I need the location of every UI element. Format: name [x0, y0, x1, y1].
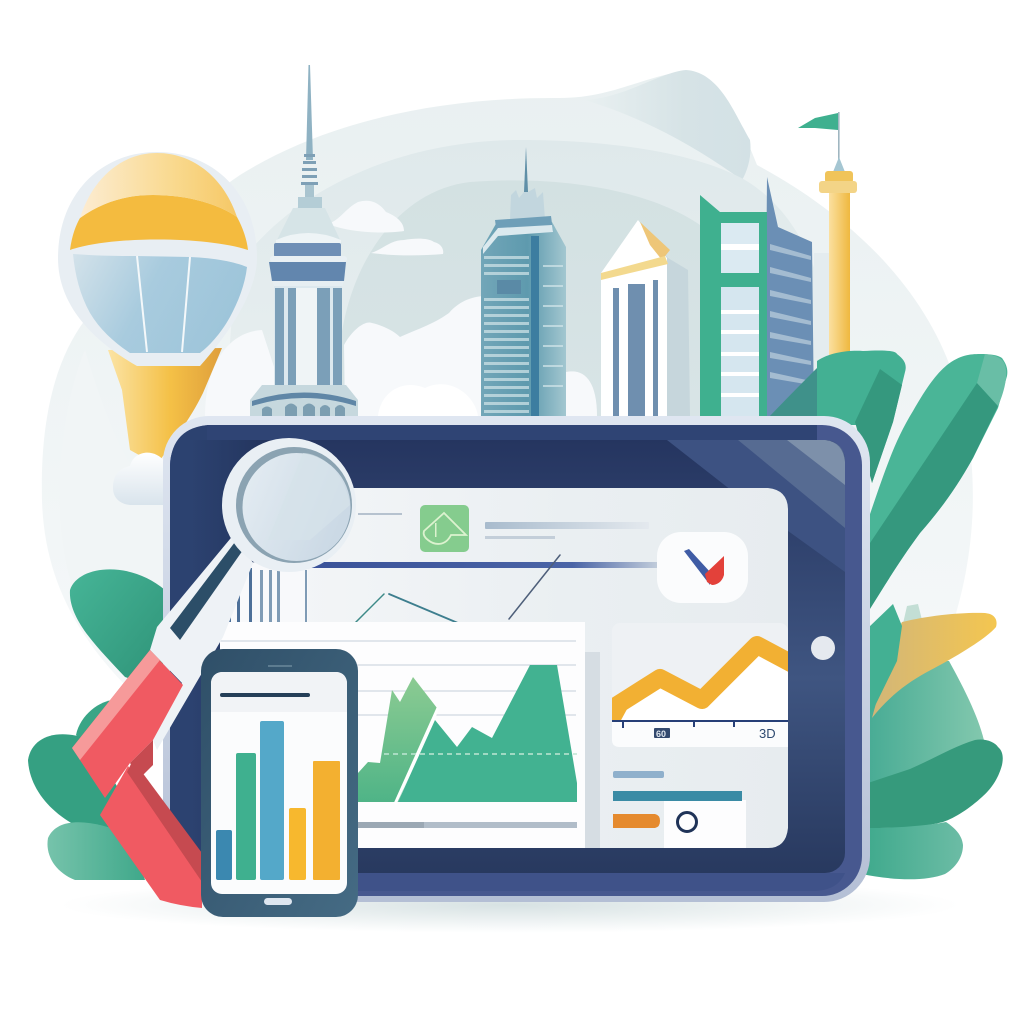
trend line behind card [355, 555, 560, 641]
footer bar [358, 822, 577, 828]
red handle grip [72, 650, 202, 908]
leaf: behind building [817, 350, 906, 483]
phone body [201, 649, 358, 917]
phone bar chart [216, 721, 340, 880]
dark green area [398, 665, 577, 802]
bulb top cap [80, 153, 237, 218]
lens rim [222, 438, 356, 572]
tablet [163, 416, 870, 902]
axis [612, 720, 788, 728]
orange trend line [600, 645, 800, 722]
phone screen [211, 672, 347, 894]
gloss band 1 [667, 440, 845, 572]
lower grip [100, 766, 202, 908]
axis labels: 60 [656, 729, 666, 739]
tablet left inner [190, 440, 307, 873]
phone heading [220, 693, 310, 697]
flag [798, 113, 838, 130]
green frame building [700, 177, 814, 416]
bulb neck [108, 348, 222, 465]
white office building [601, 220, 690, 416]
leaf: small green [868, 604, 902, 716]
gloss band 3 [787, 440, 845, 485]
dashed level [384, 753, 577, 755]
grip highlight [72, 650, 160, 760]
leaf: upper [70, 569, 165, 690]
grip shade [127, 760, 202, 882]
tablet ring top [207, 425, 817, 440]
cloud bank behind the skyline [205, 296, 597, 416]
left leaves [28, 569, 165, 880]
bulb glass ribs [137, 256, 190, 352]
tablet ring [170, 425, 862, 896]
mound top [902, 604, 924, 628]
lens glass [242, 453, 350, 561]
leaf: yellow [872, 613, 997, 718]
tablet bezel [163, 416, 870, 902]
grid lines [220, 641, 576, 715]
ground shadow [60, 877, 960, 933]
bulb outer ring [58, 152, 257, 366]
card surface [612, 623, 788, 747]
lens ring [236, 447, 352, 563]
mound [866, 661, 985, 800]
white diagonal [395, 708, 438, 804]
card shadow [585, 652, 600, 848]
upper grip [72, 650, 183, 798]
line chart card: 3D [759, 726, 776, 741]
card surface [220, 622, 585, 848]
teal skyscraper [481, 147, 566, 416]
leaf: small behind [76, 700, 130, 760]
handle slot [170, 542, 243, 640]
area under line [612, 645, 788, 722]
smartphone [201, 649, 358, 917]
header line [358, 513, 402, 515]
screen [300, 488, 788, 848]
leaf: bottom [862, 822, 963, 879]
yellow observation tower with flag [798, 112, 857, 359]
leaf: lower [868, 739, 1003, 828]
leaf: teal shadow behind building [768, 368, 825, 418]
small cloud under bulb [113, 453, 165, 505]
background halo [42, 70, 973, 690]
bulb lower cap [70, 195, 248, 250]
summary block [613, 771, 746, 848]
leaf: bottom [47, 822, 145, 880]
tower reflection stripes [220, 562, 308, 624]
tablet bottom lip [355, 873, 845, 891]
lens highlight [268, 453, 350, 540]
phone speaker [268, 665, 292, 667]
leaf: tall right [868, 354, 1007, 612]
main chart card [220, 622, 600, 848]
phone home button [264, 898, 292, 905]
bulb glass [73, 254, 247, 353]
tablet inner panel [207, 440, 845, 873]
magnifying glass [150, 438, 356, 750]
light bulb balloon [58, 152, 257, 465]
header text bars [485, 522, 649, 539]
light green area [358, 677, 437, 802]
handle [150, 533, 253, 750]
gloss band 2 [738, 440, 845, 528]
line chart card [612, 636, 788, 747]
blue divider line [310, 562, 660, 568]
camera [811, 636, 835, 660]
small clouds [328, 201, 443, 255]
left observation tower [250, 65, 358, 416]
right leaves [768, 350, 1007, 879]
green app icon [420, 505, 469, 552]
check badge [657, 532, 748, 603]
tablet left body [170, 425, 500, 891]
leaf: dark [28, 734, 125, 838]
axis label chip [654, 728, 670, 738]
